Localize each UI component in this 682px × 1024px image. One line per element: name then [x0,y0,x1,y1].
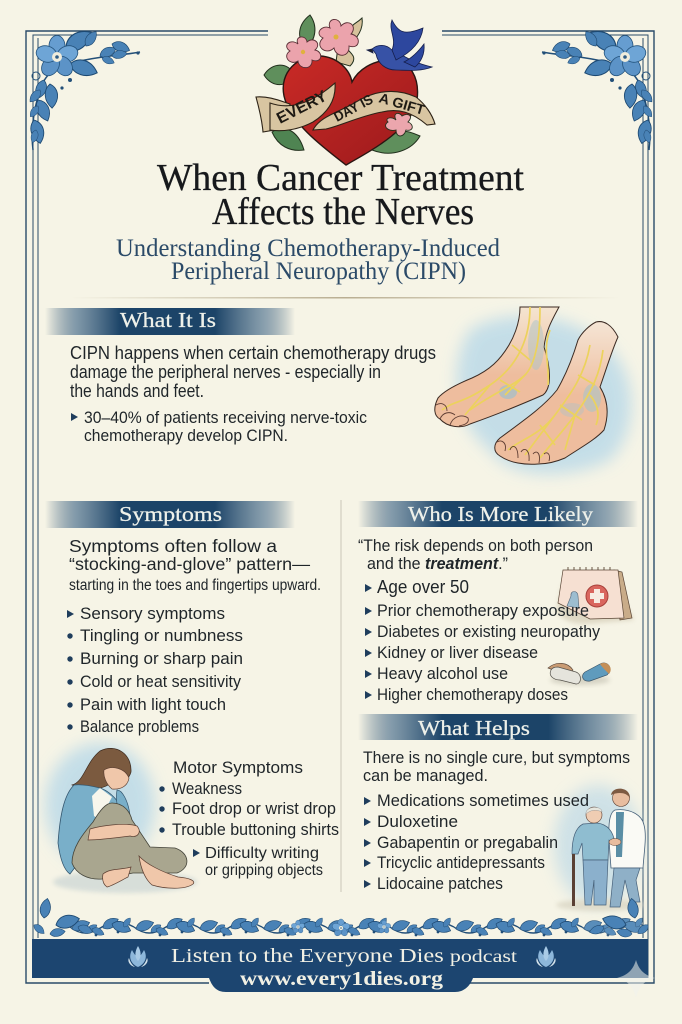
section divider [70,297,620,298]
heart tattoo emblem [256,15,435,165]
footer band [32,939,648,992]
face [104,768,129,789]
heading banner: who is more likely: Who Is More Likely [408,502,594,526]
statistic bullet: chemotherapy develop CIPN. [84,426,288,445]
title: Affects the Nerves [212,191,474,233]
sensory symptom list: Sensory symptoms [80,604,225,623]
illustration: feet with yellow nerves [435,307,631,474]
motor symptom list: Difficulty writing [205,845,319,862]
blue cardigan [58,785,118,874]
cane [572,854,575,906]
treatment list: Tricyclic antidepressants [377,853,545,872]
treatment list: Medications sometimes used [377,791,589,810]
what helps intro [363,748,630,785]
sensory symptom list [67,604,243,736]
symptoms intro text: “stocking-and-glove” pattern— [69,554,311,574]
sensory symptom list: Tingling or numbness [80,626,243,645]
definition text: damage the peripheral nerves - especially in [70,362,381,382]
icon: pills [548,663,611,685]
risk factor list [365,577,600,704]
heading banner: symptoms [45,501,295,528]
risk factor list: Higher chemotherapy doses [377,685,568,704]
footer text: website: www.every1dies.org [240,968,443,990]
what helps intro: There is no single cure, but symptoms [363,748,630,767]
risk factor list: Age over 50 [377,577,469,597]
heading banner: what it is: What It Is [120,308,216,332]
hair [72,748,131,789]
risk factor list: Heavy alcohol use [377,664,508,683]
leaves and ribbon tail behind heart [264,15,420,153]
floral corner: top right [542,25,655,150]
treatment list: Gabapentin or pregabalin [377,833,558,852]
footer text: podcast: Listen to the Everyone Dies podcast [171,945,517,967]
what helps intro: can be managed. [363,766,488,785]
heading banner: symptoms: Symptoms [119,502,222,526]
statistic bullet [71,408,367,445]
treatment list: Lidocaine patches [377,874,503,893]
raised arm [116,790,130,815]
icon: medical calendar [556,567,634,624]
nerves [442,307,603,458]
ribbon text: EVERY: EVERY [274,88,330,128]
subtitle: Peripheral Neuropathy (CIPN) [171,258,466,285]
sensory symptom list: Cold or heat sensitivity [80,672,241,691]
icon: lotus left [128,946,148,967]
sensory symptom list: Balance problems [80,717,199,736]
sensory symptom list: Pain with light touch [80,695,226,714]
heading banner: what it is [45,308,295,335]
bluebird [367,20,432,70]
pink flower on ribbon [386,113,412,136]
treatment list: Duloxetine [377,812,458,831]
panel: symptoms [45,501,339,879]
title: When Cancer Treatment [157,157,524,199]
illustration: doctor supporting patient with cane [554,785,645,911]
motor symptom list: Weakness [172,779,242,798]
floral vine border [32,898,650,938]
risk quote: “The risk depends on both person [358,537,593,555]
ribbon text: A GIFT: A GIFT [377,90,427,118]
pink flowers [287,19,358,68]
hands [609,838,621,846]
floral corner: top left [27,25,140,150]
khaki trousers [72,803,187,879]
title [157,157,524,233]
statistic bullet: 30–40% of patients receiving nerve-toxic [84,408,367,427]
patient [572,823,615,860]
sensory symptom list: Burning or sharp pain [80,649,243,668]
subtitle [116,235,500,285]
motor symptom list: Foot drop or wrist drop [172,799,336,818]
arm and hand [88,824,139,840]
illustration: seated woman holding her head and knee [45,743,197,893]
panel: what it is [45,308,436,445]
symptoms intro text: Symptoms often follow a [69,536,277,556]
icon: lotus right [536,946,556,967]
risk factor list: Kidney or liver disease [377,643,538,662]
subtitle: Understanding Chemotherapy-Induced [116,235,500,262]
motor symptom list: Trouble buttoning shirts [172,820,339,839]
heading banner: what helps: What Helps [418,716,530,740]
motor symptom list [159,758,339,879]
panel: who is more likely [358,501,638,704]
heading banner: what helps [358,714,638,740]
watermark sparkle [617,960,655,998]
risk factor list: Prior chemotherapy exposure [377,601,589,620]
definition text [70,343,436,401]
toes [436,404,550,463]
definition text: the hands and feet. [70,381,204,401]
ribbon banner [256,83,435,132]
ribbon text: DAY IS: DAY IS [331,91,375,125]
motor symptom list: Motor Symptoms [173,758,303,777]
heading banner: who is more likely [358,501,638,527]
definition text: CIPN happens when certain chemotherapy drugs [70,343,436,363]
risk factor list: Diabetes or existing neuropathy [377,622,600,641]
bare feet [103,867,131,887]
treatment list [364,791,589,893]
risk quote [358,537,593,573]
symptoms intro text [69,536,321,594]
motor symptom list: or gripping objects [205,862,323,879]
column divider [340,500,342,892]
doctor [609,810,645,868]
panel: what helps [358,714,638,893]
symptoms intro text: starting in the toes and fingertips upward. [69,577,321,594]
red heart [283,56,418,165]
risk quote: and the treatment.” [367,555,508,573]
